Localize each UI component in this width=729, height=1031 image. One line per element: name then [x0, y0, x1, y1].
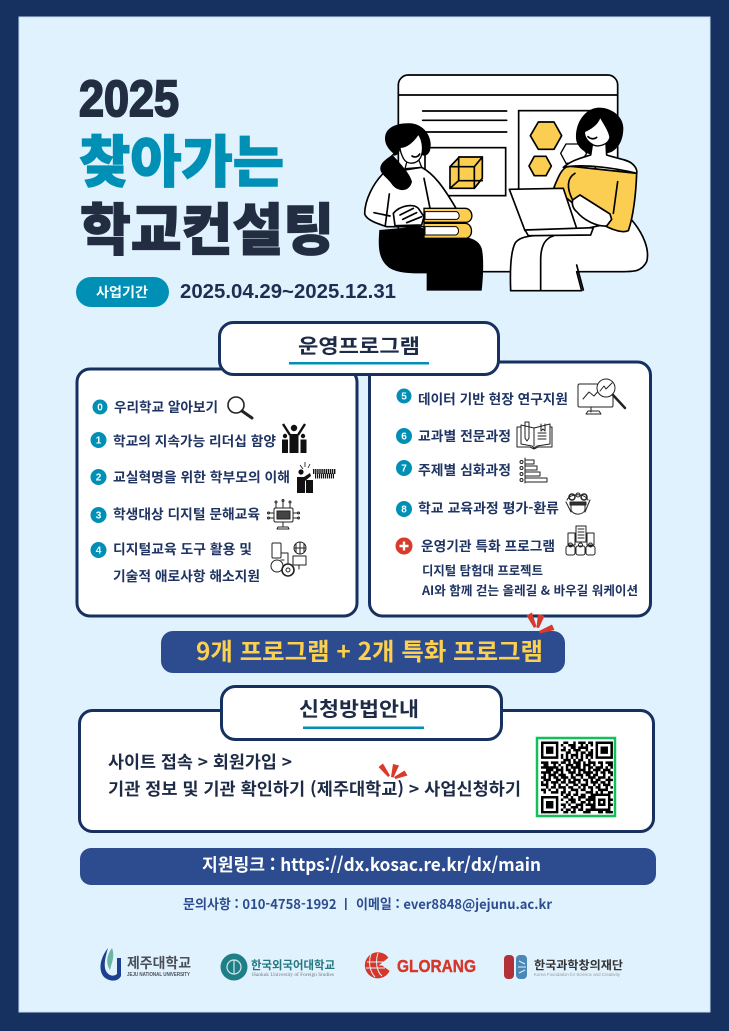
item plus: 운영기관 특화 프로그램: [421, 535, 555, 555]
heading: operating programs: 운영프로그램: [298, 330, 420, 359]
heading: how to apply: [222, 686, 502, 740]
contact info: 이메일 : ever8848@jejunu.ac.kr: [356, 893, 552, 913]
icon: cube: [450, 157, 482, 188]
icon: digital book: [268, 500, 300, 529]
icon: devices: [271, 542, 306, 576]
panel: operating programs left: [77, 369, 357, 616]
item 4: 디지털교육 도구 활용 및: [113, 538, 252, 558]
item 7: 주제별 심화과정: [418, 459, 511, 479]
item 0: 0: [97, 402, 103, 414]
logo: GLORANG: [365, 953, 476, 978]
logo: Hankuk University of Foreign Studies: 한국외국어대학교: [251, 957, 335, 973]
logo: Hankuk University of Foreign Studies: Hankuk University of Foreign Studies: [252, 973, 334, 978]
icon: head with gears: [566, 493, 590, 514]
icon: people: [282, 424, 306, 453]
special program details: 디지털 탐험대 프로젝트: [422, 560, 543, 579]
icon: books: [424, 208, 472, 238]
panel: how to apply: [80, 710, 654, 832]
icon: magnifier: [228, 397, 252, 418]
logo: Jeju National University: [101, 948, 191, 981]
seated woman left: [365, 123, 483, 291]
period dates: 2025.04.29~2025.12.31: [180, 281, 396, 303]
item 4: [90, 538, 260, 585]
QR code: [537, 738, 615, 816]
logo: Jeju National University: 제주대학교: [127, 953, 191, 973]
special program details: [421, 560, 638, 599]
banner: programs summary: 9개 프로그램 + 2개 특화 프로그램: [196, 632, 543, 667]
item 3: 3: [96, 510, 102, 522]
logo: Korea Foundation for Science and Creativity: Korea Foundation for Science and Creativity: [534, 972, 621, 977]
icon: speaker and crowd: [297, 462, 336, 493]
item 2: 2: [96, 472, 102, 484]
item 4: 4: [96, 546, 102, 556]
icon: hexagons: [529, 122, 587, 176]
period pill: [76, 277, 169, 307]
item 3: 학생대상 디지털 문해교육: [113, 503, 260, 523]
board: [398, 75, 618, 272]
heading: operating programs: [220, 322, 498, 374]
application steps: 사이트 접속 > 회원가입 >: [108, 748, 292, 773]
icon: monitor with magnifier: [578, 379, 625, 414]
icon: list bars: [520, 458, 547, 483]
item 1: 1: [96, 436, 102, 446]
icon: buildings: [566, 526, 595, 555]
item 6: 교과별 전문과정: [418, 425, 511, 445]
item 4: 기술적 애로사항 해소지원: [113, 565, 260, 585]
application steps: [108, 748, 521, 800]
item 8: 8: [401, 504, 407, 516]
logo: Jeju National University: JEJU NATIONAL UNIVERSITY: [127, 972, 190, 978]
project period: [76, 277, 396, 307]
item 2: 교실혁명을 위한 학부모의 이해: [113, 466, 290, 486]
item 5: 데이터 기반 현장 연구지원: [418, 388, 568, 408]
logo: Korea Foundation for Science and Creativity: [504, 955, 623, 979]
period label: 사업기간: [96, 281, 149, 301]
illustration: two women with board: [365, 75, 648, 291]
item 6: 6: [401, 432, 407, 442]
support link bar: 지원링크 : https://dx.kosac.re.kr/dx/main: [202, 852, 541, 877]
logo: Korea Foundation for Science and Creativity: 한국과학창의재단: [534, 957, 623, 973]
item 8: 학교 교육과정 평가-환류: [418, 497, 559, 517]
application steps: 기관 정보 및 기관 확인하기 (제주대학교) > 사업신청하기: [108, 775, 521, 800]
contact info: 문의사항 : 010-4758-1992: [183, 893, 337, 913]
title: [79, 70, 334, 267]
contact info: [183, 893, 552, 913]
item 0: 우리학교 알아보기: [114, 396, 218, 416]
title line 2: 학교컨설팅: [80, 186, 334, 267]
support link bar: [80, 848, 656, 885]
heading: how to apply: 신청방법안내: [299, 693, 419, 722]
special program details: AI와 함께 걷는 올레길 & 바우길 워케이션: [421, 580, 638, 599]
item 7: 7: [401, 464, 407, 474]
icon: red spark on steps: [378, 764, 408, 779]
title year: 2025: [79, 70, 179, 127]
title line 1: 찾아가는: [79, 118, 284, 199]
panel: operating programs right: [370, 362, 650, 616]
icon: red spark on banner: [526, 612, 554, 634]
seated woman right: [509, 108, 648, 291]
item 5: 5: [401, 392, 407, 402]
logo: Hankuk University of Foreign Studies: [220, 954, 335, 980]
item 1: 학교의 지속가능 리더십 함양: [113, 430, 276, 450]
logo: GLORANG: GLORANG: [397, 956, 476, 976]
icon: open book: [517, 422, 552, 449]
